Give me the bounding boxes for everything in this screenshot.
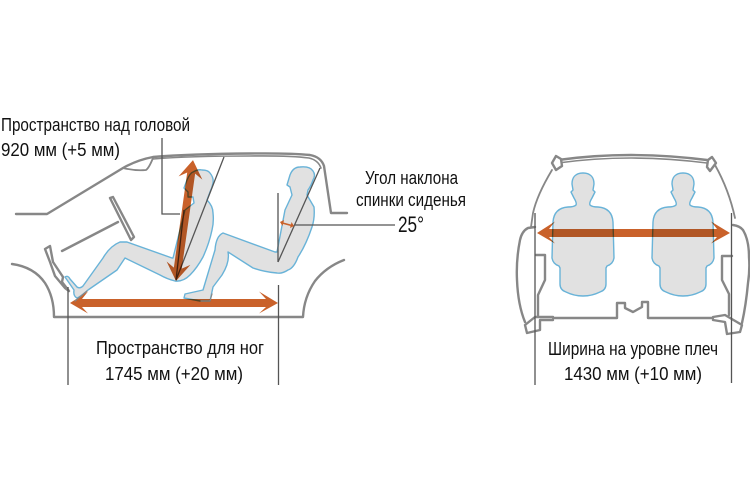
label: seatback angle: Угол наклона bbox=[365, 168, 459, 188]
label: seatback angle: 25° bbox=[398, 212, 424, 237]
front passenger figure bbox=[65, 170, 213, 298]
left seated figure bbox=[552, 173, 614, 296]
arrow: legroom bbox=[70, 292, 278, 314]
steering wheel bbox=[62, 197, 134, 251]
arrow: headroom bbox=[164, 159, 205, 283]
arrow: seatback angle bbox=[280, 220, 294, 228]
label: seatback angle bbox=[356, 168, 466, 237]
label: shoulder width bbox=[548, 339, 718, 384]
label: shoulder width: 1430 мм (+10 мм) bbox=[564, 363, 702, 384]
headroom leader line bbox=[162, 138, 180, 214]
label: shoulder width: Ширина на уровне плеч bbox=[548, 339, 718, 359]
car body side outline bbox=[12, 153, 347, 317]
label: headroom bbox=[1, 115, 190, 160]
seatback lines bbox=[176, 157, 320, 280]
label: legroom: 1745 мм (+20 мм) bbox=[105, 363, 243, 384]
label: legroom: Пространство для ног bbox=[96, 338, 264, 358]
legroom dimension lines bbox=[68, 285, 278, 385]
side view diagram bbox=[12, 138, 395, 385]
shoulder width dimension lines bbox=[535, 213, 732, 385]
rear passenger figure bbox=[184, 167, 314, 301]
car body rear outline bbox=[517, 155, 749, 334]
foot outline bbox=[75, 291, 212, 301]
arrow: shoulder width bbox=[537, 222, 730, 244]
label: headroom: Пространство над головой bbox=[1, 115, 190, 135]
pedal and firewall bbox=[45, 246, 69, 291]
label: headroom: 920 мм (+5 мм) bbox=[1, 139, 120, 160]
label: seatback angle: спинки сиденья bbox=[356, 190, 466, 210]
right seated figure bbox=[652, 173, 714, 296]
seatback angle leader bbox=[295, 224, 395, 226]
rear view diagram bbox=[517, 155, 749, 385]
label: legroom bbox=[96, 338, 264, 384]
